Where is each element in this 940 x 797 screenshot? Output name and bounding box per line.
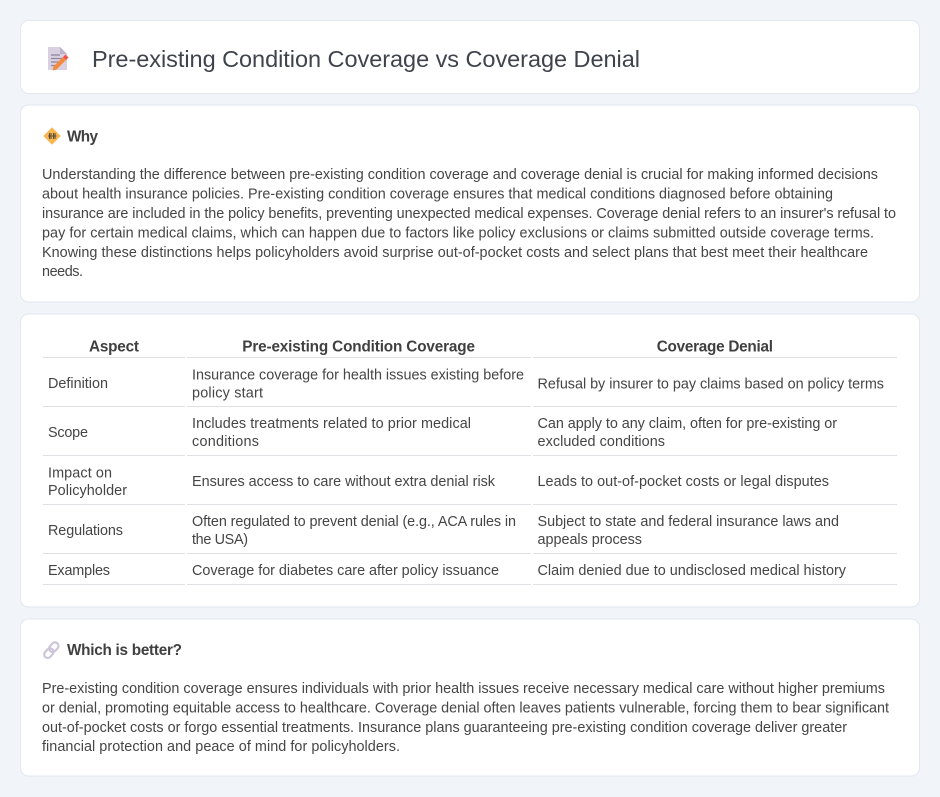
heading: why: Why bbox=[67, 128, 98, 146]
table row: scope: Can apply to any claim, often for pre-existing or bbox=[538, 416, 837, 432]
text block: why paragraph: needs. bbox=[42, 264, 83, 280]
table row: impact on policyholder: Ensures access to care without extra denial risk bbox=[192, 474, 496, 490]
text block: why paragraph: Knowing these distinctions helps policyholders avoid surprise out-of-pocket costs and select plans that best meet their healthcare bbox=[42, 245, 868, 261]
table row: scope: conditions bbox=[192, 434, 259, 450]
text block: why paragraph: about health insurance policies. Pre-existing condition coverage ensures that medical conditions diagnosed before obtaining bbox=[42, 186, 833, 202]
title: Pre-existing Condition Coverage vs Coverage Denial bbox=[92, 46, 640, 72]
text block: why paragraph bbox=[42, 167, 896, 280]
table row: definition: policy start bbox=[192, 385, 263, 401]
table header row: Coverage Denial bbox=[657, 339, 773, 356]
icon: orange diamond sign bbox=[44, 128, 60, 144]
panel: comparison table bbox=[20, 314, 920, 607]
table row: examples bbox=[48, 563, 847, 579]
icon: document with pencil bbox=[48, 47, 68, 70]
table header row: Pre-existing Condition Coverage bbox=[242, 339, 475, 356]
table row: scope: Scope bbox=[48, 425, 88, 441]
table row: impact on policyholder: Impact on bbox=[48, 465, 112, 481]
text block: which is better paragraph: financial protection and peace of mind for policyholders. bbox=[42, 739, 400, 755]
icon: chain link bbox=[43, 641, 60, 659]
text block: why paragraph: insurance are included in the policy benefits, preventing unexpected medical expenses. Coverage denial refers to an insurer's refusal to bbox=[42, 206, 896, 222]
panel: which is better bbox=[20, 619, 920, 776]
text block: which is better paragraph bbox=[42, 681, 889, 755]
table row: definition: Refusal by insurer to pay claims based on policy terms bbox=[538, 376, 884, 392]
panel: title header bbox=[20, 20, 920, 94]
table row: regulations: appeals process bbox=[538, 532, 642, 548]
table row: examples: Coverage for diabetes care after policy issuance bbox=[192, 563, 499, 579]
table header row bbox=[89, 339, 773, 356]
text block: which is better paragraph: or denial, promoting equitable access to healthcare. Coverage denial often leaves patients vulnerable, forcing them to bear significant bbox=[42, 700, 889, 716]
table row: regulations: Subject to state and federal insurance laws and bbox=[538, 514, 839, 530]
table row: scope: excluded conditions bbox=[538, 434, 665, 450]
table row: impact on policyholder: Leads to out-of-pocket costs or legal disputes bbox=[538, 474, 829, 490]
table row: scope: Includes treatments related to prior medical bbox=[192, 416, 471, 432]
text block: which is better paragraph: Pre-existing condition coverage ensures individuals with prior health issues receive necessary medical care without higher premiums bbox=[42, 681, 885, 697]
table row: impact on policyholder: Policyholder bbox=[48, 483, 127, 499]
panel: why bbox=[20, 105, 920, 302]
table row: examples: Claim denied due to undisclosed medical history bbox=[538, 563, 847, 579]
table row: regulations: Often regulated to prevent denial (e.g., ACA rules in bbox=[192, 514, 516, 530]
table row: examples: Examples bbox=[48, 563, 110, 579]
table row: scope bbox=[48, 416, 837, 450]
table row: definition bbox=[48, 367, 884, 401]
table row: definition: Insurance coverage for health issues existing before bbox=[192, 367, 524, 383]
text block: why paragraph: Understanding the difference between pre-existing condition coverage and coverage denial is crucial for making informed decisions bbox=[42, 167, 878, 183]
table row: regulations: the USA) bbox=[192, 532, 248, 548]
text block: which is better paragraph: out-of-pocket costs or forgo essential treatments. Insurance plans guaranteeing pre-existing condition coverage deliver greater bbox=[42, 720, 847, 736]
table row: regulations bbox=[48, 514, 839, 548]
heading: which is better: Which is better? bbox=[67, 642, 182, 659]
table header row: Aspect bbox=[89, 339, 139, 356]
text block: why paragraph: pay for certain medical claims, which can happen due to factors like policy exclusions or claims submitted outside coverage terms. bbox=[42, 226, 874, 242]
table row: definition: Definition bbox=[48, 376, 108, 392]
table row: regulations: Regulations bbox=[48, 523, 123, 539]
table row: impact on policyholder bbox=[48, 465, 829, 499]
